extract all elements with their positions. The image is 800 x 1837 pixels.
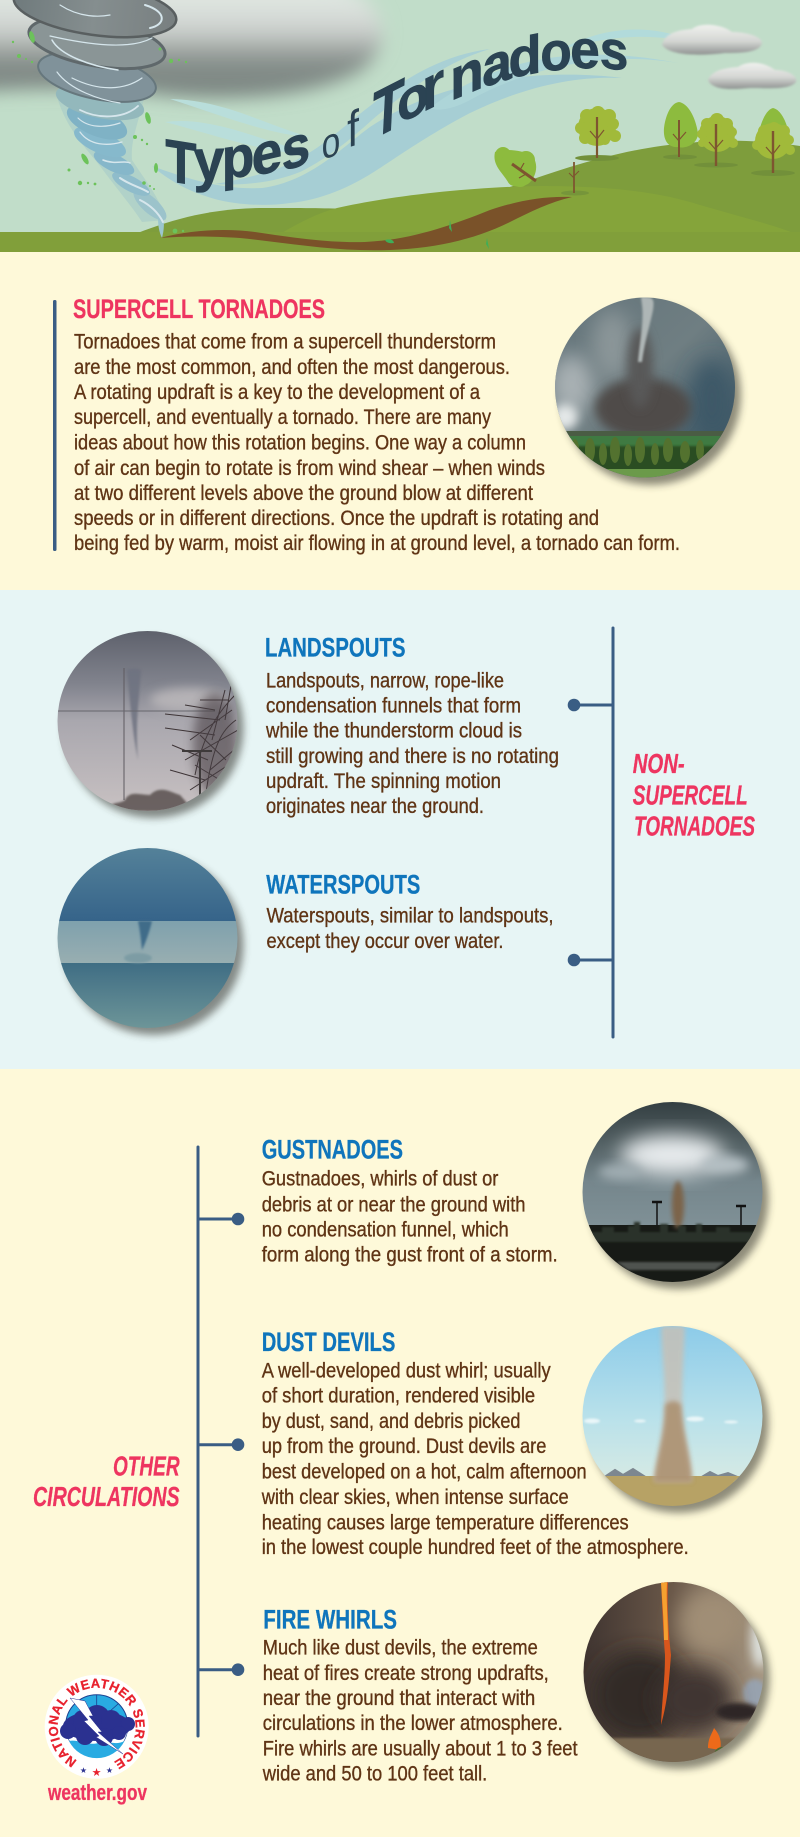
flying leaves: [12, 31, 187, 233]
text block: fire whirls: circulations in the lower atmosphere.: [263, 1710, 563, 1735]
text block: fire whirls: heat of fires create strong updrafts,: [263, 1660, 549, 1685]
text block: waterspouts: except they occur over water.: [266, 928, 504, 953]
panel: supercell tornadoes: [53, 298, 746, 555]
wind ribbons: [152, 30, 700, 205]
text block: supercell description: [74, 329, 680, 555]
storm cloud: [0, 0, 382, 98]
text block: supercell description: at two different levels above the ground blow at different: [74, 480, 533, 505]
text block: supercell description: A rotating updraft is a key to the development of a: [74, 379, 481, 404]
round tree: [697, 113, 738, 166]
tree: [575, 106, 621, 158]
text block: supercell description: are the most common, and often the most dangerous.: [74, 354, 510, 379]
heading: supercell tornadoes: SUPERCELL TORNADOES: [73, 294, 325, 324]
text block: gustnadoes: [262, 1134, 558, 1267]
tall tree: [664, 102, 698, 157]
text block: fire whirls: Much like dust devils, the extreme: [263, 1635, 538, 1660]
text block: landspouts: condensation funnels that form: [266, 693, 521, 718]
label: other circulations: OTHER: [113, 1451, 180, 1482]
text block: supercell description: supercell, and eventually a tornado. There are many: [74, 404, 491, 429]
heading: waterspouts: WATERSPOUTS: [266, 869, 420, 899]
text block: fire whirls: Fire whirls are usually about 1 to 3 feet: [263, 1735, 578, 1760]
heading: fire whirls: FIRE WHIRLS: [263, 1604, 397, 1634]
text block: landspouts: [265, 633, 559, 818]
logo ring text: NATIONAL WEATHER SERVICE: [48, 1678, 145, 1770]
panel: non-supercell tornadoes: [0, 590, 800, 1069]
text block: gustnadoes: debris at or near the ground with: [262, 1191, 526, 1216]
photo: waterspout: [55, 845, 244, 1035]
text block: supercell description: of air can begin to rotate is from wind shear – when winds: [74, 455, 545, 480]
text block: dust devils: A well-developed dust whirl; usually: [262, 1358, 551, 1383]
photo: dust devil: [580, 1324, 768, 1513]
text block: supercell description: speeds or in different directions. Once the updraft is rotating and: [74, 505, 599, 530]
text block: dust devils: in the lowest couple hundred feet of the atmosphere.: [262, 1534, 689, 1559]
photo: fire whirl: [580, 1580, 770, 1769]
text block: supercell description: being fed by warm, moist air flowing in at ground level, a tornado can form.: [74, 530, 680, 555]
title: o: [322, 117, 340, 170]
heading: landspouts: LANDSPOUTS: [265, 633, 406, 663]
label: other circulations: CIRCULATIONS: [33, 1481, 180, 1512]
heading: dust devils: DUST DEVILS: [262, 1327, 395, 1357]
title: f: [347, 100, 360, 160]
text block: fire whirls: [262, 1604, 578, 1785]
text block: supercell description: ideas about how this rotation begins. One way a column: [74, 430, 526, 454]
hills: [0, 141, 800, 252]
photo: supercell tornado: [550, 290, 741, 485]
text block: dust devils: up from the ground. Dust devils are: [262, 1433, 546, 1458]
clouds right: [662, 25, 796, 89]
text block: landspouts: still growing and there is no rotating: [266, 743, 559, 768]
text block: landspouts: originates near the ground.: [266, 793, 484, 818]
text block: gustnadoes: Gustnadoes, whirls of dust or: [262, 1165, 498, 1190]
logo stars: ★: [80, 1766, 87, 1775]
title: o: [397, 59, 429, 136]
text block: gustnadoes: no condensation funnel, which: [262, 1217, 509, 1242]
title: y: [194, 127, 225, 193]
photo: gustnado: [580, 1100, 768, 1289]
text block: dust devils: with clear skies, when intense surface: [261, 1484, 569, 1509]
text block: fire whirls: wide and 50 to 100 feet tall.: [262, 1760, 487, 1785]
text block: waterspouts: [266, 869, 554, 953]
panel: other circulations: [33, 1102, 775, 1805]
text block: dust devils: of short duration, rendered visible: [262, 1383, 535, 1408]
text block: landspouts: while the thunderstorm cloud is: [265, 718, 522, 743]
label: non-supercell tornadoes: NON-: [633, 748, 685, 779]
title: T: [371, 64, 406, 155]
title: p: [222, 122, 254, 192]
text block: dust devils: by dust, sand, and debris picked: [262, 1408, 520, 1433]
logo stars: ★: [106, 1766, 113, 1775]
logo: National Weather Service: [44, 1674, 149, 1779]
tornado: [10, 0, 180, 238]
bracket: other circulations: [198, 1147, 244, 1736]
double tree: [752, 108, 795, 173]
title: e: [570, 20, 600, 81]
text block: dust devils: best developed on a hot, calm afternoon: [262, 1458, 587, 1483]
text block: gustnadoes: form along the gust front of a storm.: [262, 1242, 558, 1267]
weather.gov link text: weather.gov: [47, 1780, 148, 1805]
uprooted tree: [494, 147, 536, 187]
text block: dust devils: [261, 1327, 689, 1559]
text block: supercell description: Tornadoes that come from a supercell thunderstorm: [74, 329, 496, 354]
label: non-supercell tornadoes: [633, 748, 755, 841]
title: s: [600, 19, 628, 83]
title: n: [450, 36, 484, 114]
text block: fire whirls: near the ground that interact with: [263, 1685, 535, 1710]
title: a: [482, 27, 513, 100]
title: r: [422, 48, 444, 126]
text block: waterspouts: Waterspouts, similar to landspouts,: [266, 903, 554, 928]
label: non-supercell tornadoes: SUPERCELL: [633, 779, 748, 810]
text block: dust devils: heating causes large temperature differences: [262, 1509, 629, 1534]
text block: landspouts: Landspouts, narrow, rope-like: [266, 667, 504, 692]
photo: landspout: [55, 630, 244, 818]
trees: [494, 102, 795, 196]
title: o: [540, 21, 572, 84]
title: e: [252, 118, 282, 190]
title: d: [509, 23, 541, 90]
title: s: [282, 111, 310, 184]
label: other circulations: [33, 1451, 180, 1512]
text block: landspouts: updraft. The spinning motion: [266, 768, 501, 793]
title: [166, 33, 627, 193]
panel: header illustration: [0, 0, 800, 252]
title: T: [165, 126, 197, 198]
heading: gustnadoes: GUSTNADOES: [262, 1134, 403, 1164]
sapling: [569, 162, 579, 193]
bracket: non-supercell: [568, 628, 613, 1037]
logo stars: ★: [92, 1766, 102, 1779]
